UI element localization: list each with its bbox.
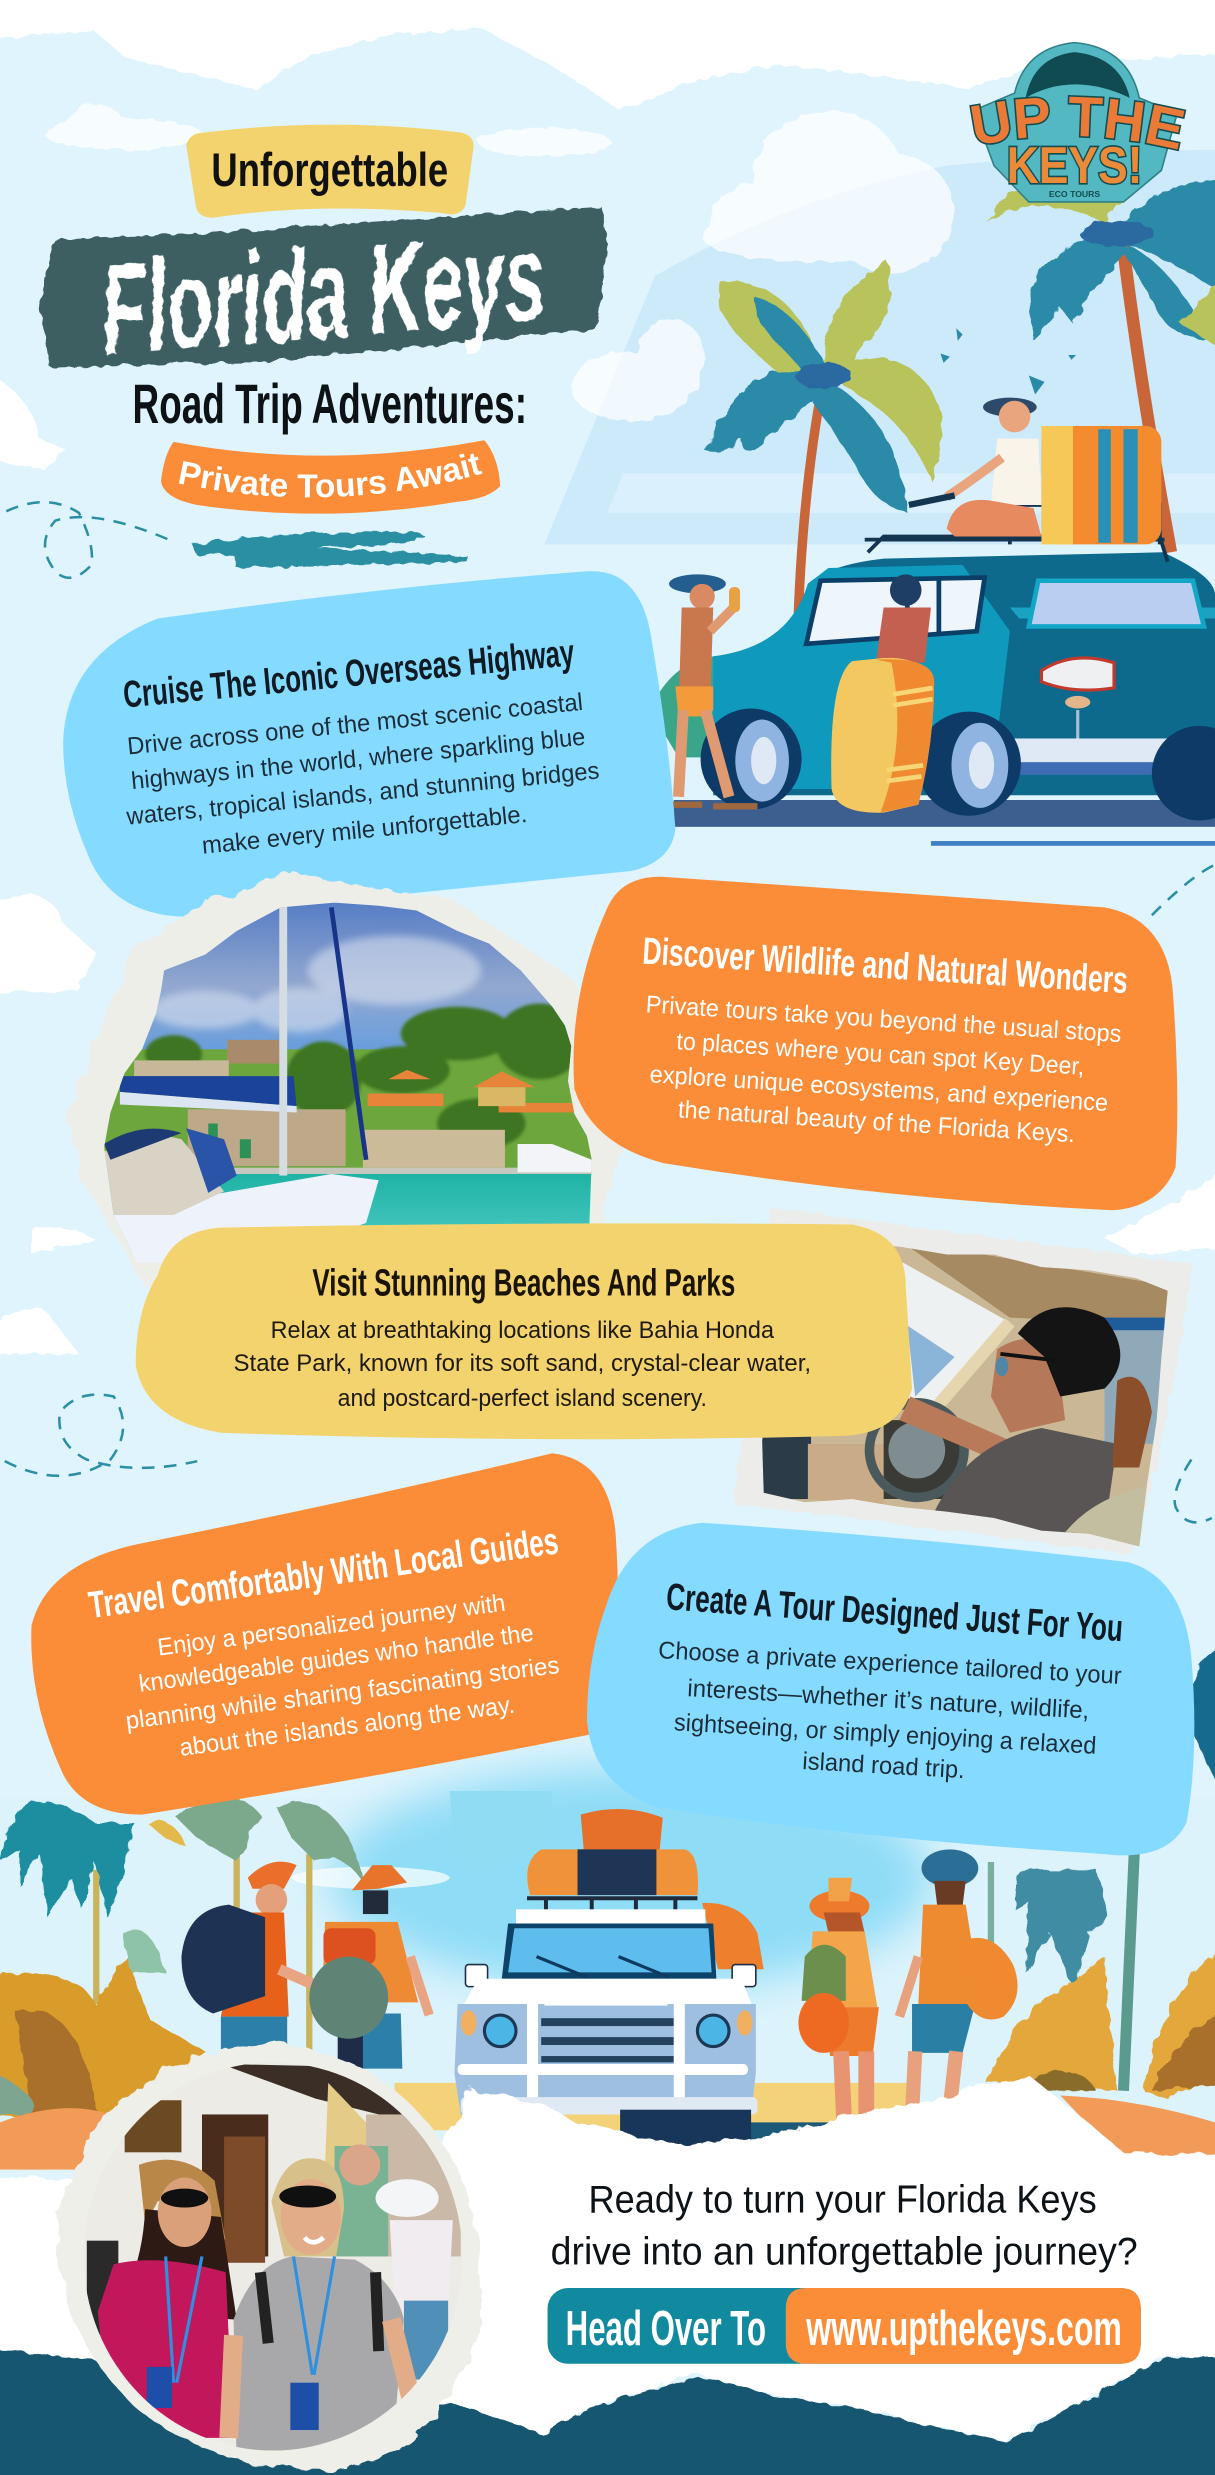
card 2: Discover Wildlife and Natural Wonders: the natural beauty of the Florida Keys. (677, 1096, 1076, 1148)
call to action text: Ready to turn your Florida Keys (589, 2178, 1097, 2221)
illustration: road (674, 800, 1215, 846)
tourists scene (79, 2059, 473, 2462)
card 3: Visit Stunning Beaches And Parks: State Park, known for its soft sand, crystal-clear water, (234, 1350, 811, 1377)
banner: Florida Keys: Florida Keys (96, 205, 551, 383)
illustration: roof rack and luggage (865, 426, 1168, 562)
hiker three (798, 1878, 879, 2122)
card 2: Discover Wildlife and Natural Wonders (573, 877, 1177, 1210)
photo: marina with sailboat (68, 871, 620, 1286)
bottom scene: foliage (0, 1941, 1215, 2122)
subtitle: Road Trip Adventures: (133, 373, 527, 435)
marina scene (95, 892, 600, 1262)
palm tree centre (705, 260, 942, 679)
top torn white cloud band (0, 0, 1215, 110)
label: Unforgettable: Unforgettable (211, 144, 448, 197)
dashed routes middle (5, 865, 1215, 1522)
bottom scene: palms left (0, 1799, 366, 2051)
card 3: Visit Stunning Beaches And Parks: and postcard-perfect island scenery. (338, 1385, 707, 1412)
illustration: woman on roof (909, 398, 1041, 536)
card 1: Cruise the Iconic Overseas Highway (63, 571, 675, 917)
card 4: Travel Comfortably With Local Guides: knowledgeable guides who handle the (137, 1620, 535, 1698)
navy torn base (0, 2343, 1215, 2475)
photo: man driving (734, 1207, 1191, 1554)
card 2: Discover Wildlife and Natural Wonders: to places where you can spot Key Deer, (676, 1028, 1085, 1081)
call to action text: drive into an unforgettable journey? (551, 2230, 1138, 2273)
label: Unforgettable (186, 125, 474, 218)
torn white paper panel (0, 2077, 1215, 2462)
card 4: Travel Comfortably With Local Guides: planning while sharing fascinating stories (124, 1652, 561, 1735)
card 1: Cruise the Iconic Overseas Highway: Drive across one of the most scenic coastal (126, 689, 584, 760)
card 1: Cruise the Iconic Overseas Highway: Cruise The Iconic Overseas Highway (121, 632, 576, 717)
card 5: Create A Tour Designed Just For You: island road trip. (802, 1748, 966, 1784)
card 4: Travel Comfortably With Local Guides: about the islands along the way. (178, 1692, 516, 1762)
card 5: Create A Tour Designed Just For You: sightseeing, or simply enjoying a relaxed (673, 1709, 1097, 1760)
logo: Up The Keys Eco Tours: ECO TOURS (1049, 189, 1100, 199)
card 1: Cruise the Iconic Overseas Highway: highways in the world, where sparkling blue (130, 724, 586, 795)
card 3: Visit Stunning Beaches And Parks: Relax at breathtaking locations like Bahia Honda (271, 1317, 774, 1344)
card 5: Create A Tour Designed Just For You (587, 1523, 1194, 1855)
logo: Up The Keys Eco Tours: UP THE (969, 95, 1186, 152)
card 3: Visit Stunning Beaches And Parks (136, 1223, 912, 1439)
torn paper frame (57, 2043, 481, 2470)
card 2: Discover Wildlife and Natural Wonders: explore unique ecosystems, and experience (649, 1061, 1109, 1117)
illustration: person by car and suitcase (831, 574, 934, 813)
call to action text (551, 2178, 1138, 2273)
sky layers and clouds (0, 104, 1215, 1354)
card 3: Visit Stunning Beaches And Parks: Visit Stunning Beaches And Parks (312, 1262, 735, 1304)
logo: Up The Keys Eco Tours (969, 42, 1186, 203)
card 2: Discover Wildlife and Natural Wonders: Private tours take you beyond the usual stops (645, 991, 1122, 1048)
jeep (454, 1809, 764, 2149)
card 4: Travel Comfortably With Local Guides (31, 1453, 618, 1815)
card 4: Travel Comfortably With Local Guides: Enjoy a personalized journey with (156, 1590, 507, 1662)
torn paper frame (68, 871, 620, 1286)
bottom scene: sand and ground (0, 2083, 1215, 2170)
bottom scene: palms and foliage right (991, 1641, 1215, 2091)
bottom scene: sky and clouds (0, 1767, 1215, 2162)
card 5: Create A Tour Designed Just For You: Choose a private experience tailored to your (658, 1637, 1122, 1690)
button: Head Over To www.upthekeys.com (548, 2288, 1141, 2364)
dashed route top left (6, 502, 169, 578)
birds (940, 328, 1076, 394)
photo: smiling tourists (57, 2043, 481, 2470)
illustration: standing woman (669, 574, 757, 806)
palm tree right (986, 178, 1215, 552)
hiker two (309, 1865, 429, 2069)
hiker one (181, 1862, 350, 2051)
hiker four (899, 1849, 1018, 2114)
banner: Florida Keys (39, 205, 607, 383)
pill: Private Tours Await: Private Tours Await (179, 454, 482, 498)
logo: Up The Keys Eco Tours: KEYS! (1007, 137, 1142, 195)
card 4: Travel Comfortably With Local Guides: Travel Comfortably With Local Guides (86, 1520, 561, 1627)
torn paper frame (734, 1207, 1191, 1554)
card 1: Cruise the Iconic Overseas Highway: make every mile unforgettable. (201, 801, 528, 860)
brush stroke (193, 532, 467, 568)
card 1: Cruise the Iconic Overseas Highway: waters, tropical islands, and stunning bridges (124, 757, 601, 831)
car interior scene (762, 1246, 1168, 1546)
button: Head Over To www.upthekeys.com: Head Over To (566, 2302, 766, 2356)
illustration: classic car (650, 552, 1215, 821)
card 5: Create A Tour Designed Just For You: interests—whether it’s nature, wildlife, (687, 1675, 1090, 1725)
